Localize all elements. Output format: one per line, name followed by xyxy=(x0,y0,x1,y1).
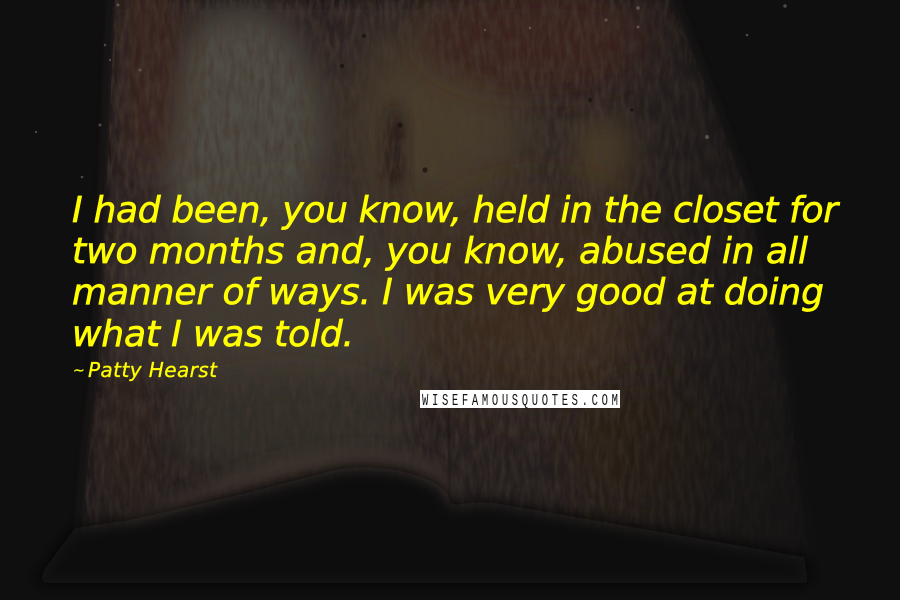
quote line 4: what I was told. xyxy=(72,314,354,355)
page colour patches xyxy=(116,0,668,502)
quote text xyxy=(72,190,840,355)
book center spine xyxy=(448,380,450,500)
attribution name: Patty Hearst xyxy=(88,358,218,382)
speckles xyxy=(35,4,787,178)
texture grain xyxy=(85,0,772,528)
quote line 1: I had been, you know, held in the closet for xyxy=(72,190,840,231)
attribution tilde: ~ xyxy=(73,363,85,379)
book curved page edge xyxy=(125,458,450,530)
quote line 2: two months and, you know, abused in all xyxy=(72,231,808,272)
book lower dark shape xyxy=(34,467,809,583)
book pages glow xyxy=(80,0,809,560)
quote line 3: manner of ways. I was very good at doing xyxy=(72,272,824,313)
background: dark textured book scene xyxy=(34,0,797,550)
dark specks xyxy=(340,34,634,173)
attribution xyxy=(73,358,218,382)
watermark badge: WISEFAMOUSQUOTES.COM xyxy=(422,392,618,411)
